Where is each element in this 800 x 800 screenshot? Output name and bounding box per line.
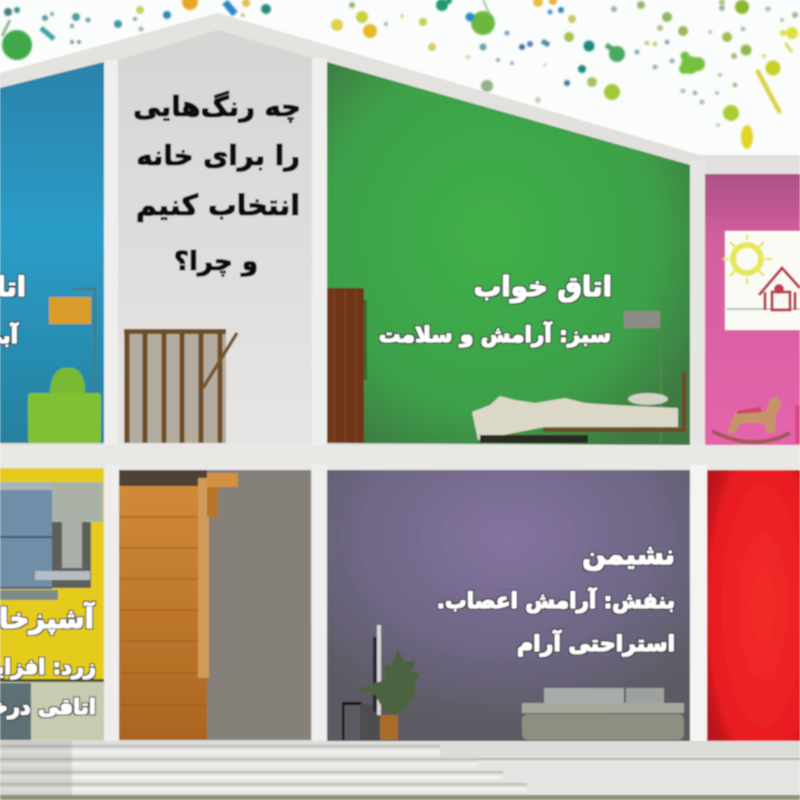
floor slab <box>0 445 800 470</box>
title: which colours to choose: و چرا؟ <box>174 247 258 277</box>
panel: purple living room <box>327 470 690 741</box>
panel: stairwell <box>119 470 311 740</box>
sofa <box>522 688 684 740</box>
title: which colours to choose: را برای خانه <box>136 140 300 172</box>
text: comfortable rest: استراحتی آرام <box>517 629 675 657</box>
lamp <box>49 289 95 443</box>
title: which colours to choose: انتخاب کنیم <box>136 189 300 222</box>
front steps <box>0 741 800 800</box>
wardrobe door <box>327 288 367 443</box>
panel: yellow kitchen <box>0 468 104 740</box>
title: which colours to choose: چه رنگ‌هایی <box>133 90 301 123</box>
plant and side table <box>342 625 421 740</box>
heading: living room: نشیمن <box>582 539 675 571</box>
panel: central white room with title <box>118 30 312 445</box>
text: purple meaning: بنفش: آرامش اعصاب. <box>437 587 675 614</box>
panel: pink room <box>705 174 800 445</box>
heading: bedroom: اتاق خواب <box>474 271 612 303</box>
stair railing <box>124 329 237 443</box>
rocking horse <box>712 396 790 442</box>
divider column <box>690 160 705 450</box>
bed <box>472 372 684 443</box>
green armchair <box>28 368 101 443</box>
framed child drawing <box>723 231 800 330</box>
panel: red room <box>707 470 800 742</box>
paint splatters <box>2 0 798 149</box>
lower column 3 <box>690 465 707 745</box>
panel: blue room <box>0 62 104 443</box>
floor lamp <box>624 311 661 443</box>
text: green meaning: سبز: آرامش و سلامت <box>379 321 611 348</box>
lower cabinets <box>0 679 104 740</box>
upper floor column right <box>312 58 327 450</box>
pink toy <box>795 405 800 443</box>
title: which colours to choose <box>133 90 301 277</box>
kitchen cabinets <box>0 482 103 600</box>
lower column 1 <box>104 465 119 745</box>
upper floor column <box>104 60 118 450</box>
panel: green bedroom <box>327 62 690 445</box>
lower column 2 <box>312 465 327 745</box>
